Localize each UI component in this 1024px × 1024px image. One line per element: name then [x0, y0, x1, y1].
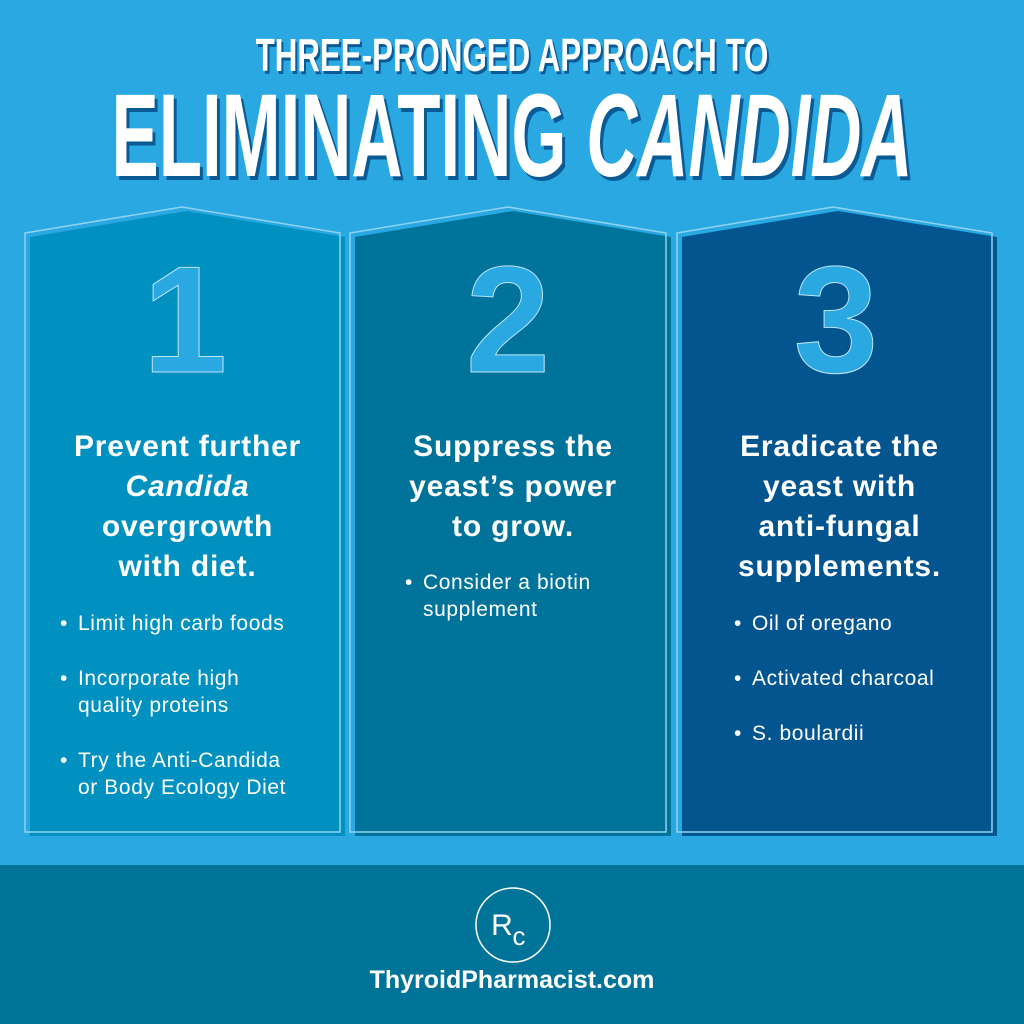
panel 1 bullets: quality proteins: [78, 694, 229, 717]
main title: ELIMINATING CANDIDA: [111, 70, 913, 202]
panel 3 heading: [738, 430, 941, 583]
logo circle: [476, 888, 550, 962]
subtitle line: THREE-PRONGED APPROACH TO: [256, 29, 768, 81]
panel 3 bullets: Activated charcoal: [752, 667, 934, 690]
panel 3 bullets: S. boulardii: [752, 722, 864, 745]
logo circle: R: [491, 909, 513, 942]
number 2: 2: [466, 235, 550, 405]
panel 3 bullets: Oil of oregano: [752, 612, 892, 635]
panel 1 heading: [74, 430, 301, 583]
title: [111, 29, 913, 202]
panel 2 bullets: [406, 571, 591, 621]
number 3: 3: [794, 235, 878, 405]
panel 1 heading: with diet.: [118, 550, 256, 583]
panel 2 heading: yeast’s power: [409, 470, 617, 503]
footer band: [0, 865, 1024, 1024]
logo circle: c: [512, 921, 526, 951]
panel 1 bullets: [60, 612, 286, 799]
panel 1 bullets: Try the Anti-Candida: [78, 749, 281, 772]
panel 1 shape: [25, 207, 345, 836]
panel 3 heading: yeast with: [763, 470, 916, 503]
panel 2 shape: [350, 207, 671, 836]
panel 3 heading: Eradicate the: [740, 430, 939, 463]
panel 2 heading: [409, 430, 617, 543]
panel 2 bullets: supplement: [423, 598, 538, 621]
panel 1 heading: overgrowth: [102, 510, 273, 543]
panel 3 heading: supplements.: [738, 550, 941, 583]
panel 1 bullets: Limit high carb foods: [78, 612, 284, 635]
panel 3 shape: [677, 207, 997, 836]
panel 1 bullets: Incorporate high: [78, 667, 239, 690]
panel 1 heading: Candida: [126, 470, 249, 503]
panel 3 heading: anti-fungal: [758, 510, 921, 543]
number 1: 1: [143, 235, 227, 405]
panel 2 heading: Suppress the: [413, 430, 613, 463]
panel 2 heading: to grow.: [452, 510, 574, 543]
panel 3 bullets: [734, 612, 934, 745]
panel 1 bullets: or Body Ecology Diet: [78, 776, 286, 799]
panel 2 bullets: Consider a biotin: [423, 571, 591, 594]
footer url: ThyroidPharmacist.com: [370, 966, 654, 994]
panel 1 heading: Prevent further: [74, 430, 301, 463]
